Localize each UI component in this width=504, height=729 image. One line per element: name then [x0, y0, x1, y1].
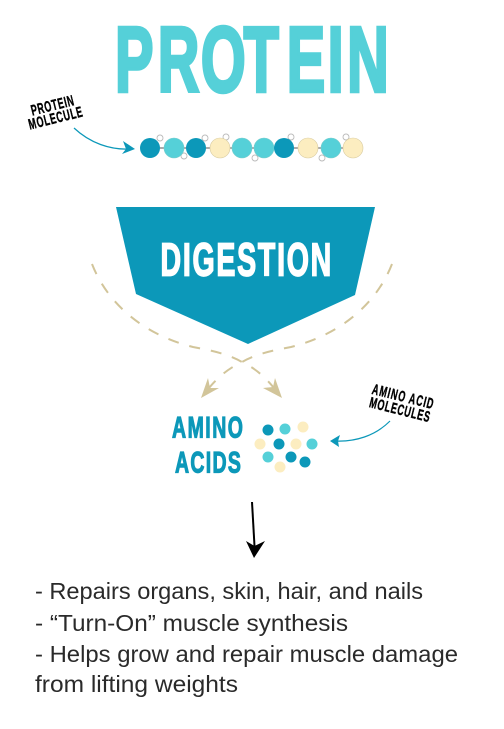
label: protein molecule	[24, 91, 85, 133]
amino acid dots	[254, 422, 318, 472]
digestion heading: DIGESTION	[160, 234, 333, 286]
dashed arrow: left to right crossing	[92, 264, 282, 398]
beads	[140, 138, 363, 158]
arrow: to protein molecule	[74, 128, 135, 154]
benefits list: - Helps grow and repair muscle damage	[35, 641, 458, 667]
protein molecule chain	[140, 134, 363, 161]
benefits list: - Repairs organs, skin, hair, and nails	[35, 578, 423, 604]
small side atoms	[157, 134, 349, 161]
label: protein molecule: PROTEIN	[29, 92, 76, 119]
amino acids heading: AMINO	[172, 411, 244, 445]
arrow: to amino acid dots	[330, 421, 390, 447]
benefits list: from lifting weights	[35, 671, 238, 697]
black arrow down	[246, 502, 265, 558]
digestion funnel	[116, 207, 375, 344]
amino acids heading	[172, 411, 244, 480]
dashed arrow: right to left crossing	[201, 264, 392, 398]
label: protein molecule: MOLECULE	[27, 103, 85, 133]
benefits list	[35, 578, 458, 697]
label: amino acid molecules: AMINO ACID	[370, 381, 436, 413]
title: PROTEIN	[115, 9, 389, 112]
amino acids heading: ACIDS	[175, 446, 242, 480]
label: amino acid molecules	[367, 381, 436, 426]
benefits list: - “Turn-On” muscle synthesis	[35, 610, 348, 636]
label: amino acid molecules: MOLECULES	[368, 394, 432, 426]
